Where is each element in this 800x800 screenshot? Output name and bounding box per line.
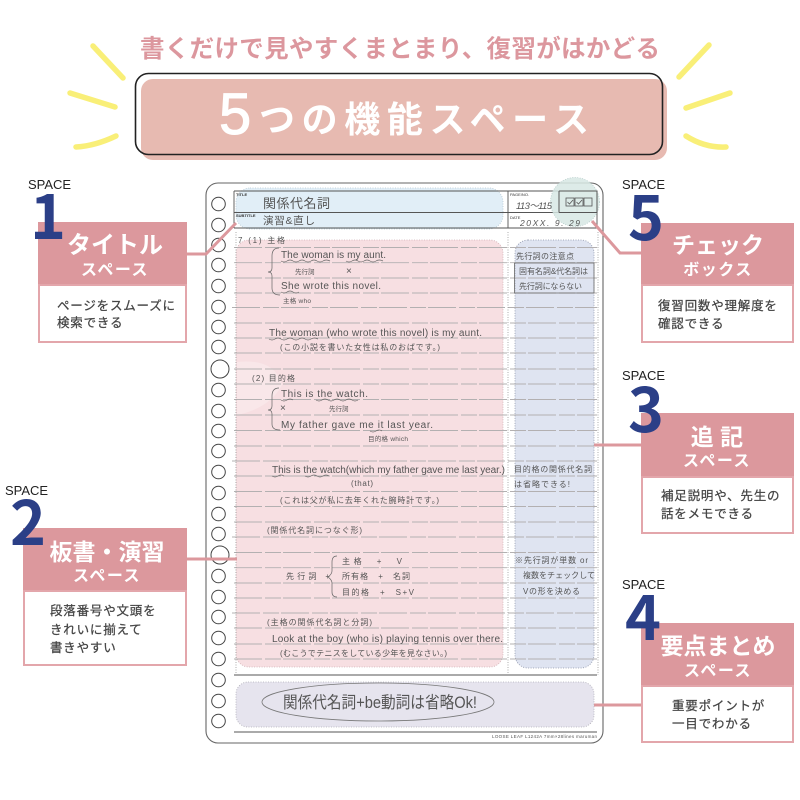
callout 5: check box space: 5 — [628, 169, 664, 258]
callout 5: check box space: ボックス — [683, 261, 753, 279]
callout 3: notes space: 追 記 — [691, 424, 743, 450]
title banner: つの機能スペース — [259, 99, 589, 140]
board handwriting: She wrote this novel. — [281, 281, 381, 292]
summary bubble — [262, 683, 494, 721]
connector: summary — [594, 704, 641, 706]
board handwriting: 目的格 which — [368, 434, 408, 443]
board handwriting: The woman (who wrote this novel) is my aunt. — [269, 328, 482, 339]
board handwriting: (主格の関係代名詞と分詞) — [267, 617, 372, 627]
board handwriting: My father gave me it last year. — [281, 420, 433, 431]
header labels and handwriting: PAGE/NO. — [510, 192, 529, 197]
space 1 highlight: title area — [236, 188, 503, 229]
callout 3: notes space: SPACE — [622, 368, 665, 383]
connector: board — [187, 558, 237, 560]
callout 1: title space: 検索できる — [57, 316, 123, 330]
board handwriting: 7 (1) 主格 — [238, 235, 285, 245]
callout 1: title space: 1 — [30, 168, 66, 257]
decorative sun rays left — [70, 46, 123, 147]
notes column handwriting: 先行詞の注意点 — [516, 251, 574, 261]
board handwriting: 主格 who — [283, 296, 311, 305]
board handwriting: (この小説を書いた女性は私のおばです。) — [280, 342, 440, 352]
callout 1: title space: スペース — [81, 262, 149, 279]
callout 1: title space: ページをスムーズに — [57, 298, 176, 313]
board handwriting: 目的格 + S+V — [342, 587, 415, 597]
callout 3: notes space — [622, 361, 794, 533]
callout 5: check box space: 確認できる — [658, 316, 724, 331]
footer brand: LOOSE LEAF L1242A 7mm×28lines maruman — [492, 734, 597, 739]
notes column handwriting: ※先行詞が単数 or — [515, 555, 588, 565]
notes column handwriting: 複数をチェックして — [523, 570, 595, 580]
board handwriting: This is the watch(which my father gave me last year.) — [272, 465, 505, 476]
board handwriting: (2) 目的格 — [252, 373, 295, 383]
callout 3: notes space: 話をメモできる — [661, 507, 754, 521]
notes column handwriting — [514, 251, 595, 596]
callout 5: check box space: 復習回数や理解度を — [658, 298, 778, 313]
header boxes — [234, 191, 597, 228]
callout 3: notes space: スペース — [683, 453, 751, 470]
callout 4: summary space: 要点まとめ — [660, 633, 776, 659]
callout 4: summary space — [622, 569, 794, 742]
board handwriting: Look at the boy (who is) playing tennis over there. — [272, 634, 503, 645]
space 4 highlight: summary area — [236, 682, 594, 727]
callout 1: title space: SPACE — [28, 177, 71, 192]
callout 2: board space: SPACE — [5, 483, 48, 498]
callout 2: board space: 板書・演習 — [50, 539, 164, 565]
board handwriting: (これは父が私に去年くれた腕時計です。) — [280, 495, 439, 505]
check box highlight circle — [550, 178, 600, 226]
notebook page — [206, 178, 603, 743]
board handwriting: 先行詞 — [295, 267, 315, 276]
header labels and handwriting: 演習&直し — [263, 214, 315, 227]
decorative sun rays right — [679, 45, 730, 147]
callout 5: check box space — [622, 169, 794, 342]
notes column handwriting: 目的格の関係代名詞 — [514, 464, 592, 474]
header labels and handwriting: TITLE — [236, 192, 247, 197]
callout 5: check box space: チェック — [672, 232, 764, 258]
callout 1: title space — [28, 168, 187, 342]
board handwriting: × — [346, 266, 352, 277]
connector: check box — [592, 221, 641, 253]
callout 2: board space: きれいに揃えて — [50, 622, 142, 637]
notes column handwriting: 先行詞にならない — [519, 281, 582, 291]
header labels and handwriting: DATE — [510, 215, 521, 220]
board handwriting: (むこうでテニスをしている少年を見なさい。) — [280, 648, 447, 658]
binder holes — [211, 197, 229, 728]
callout 2: board space: 段落番号や文頭を — [50, 603, 156, 618]
notes column handwriting: Vの形を決める — [523, 586, 580, 596]
callout 4: summary space: スペース — [684, 663, 752, 680]
connector: title — [187, 223, 236, 254]
summary bubble: 関係代名詞+be動詞は省略Ok! — [283, 693, 477, 712]
callout 5: check box space: SPACE — [622, 177, 665, 192]
callout 4: summary space: 一目でわかる — [672, 717, 752, 731]
callout 3: notes space: 補足説明や、先生の — [661, 488, 780, 503]
callout 2: board space — [5, 474, 187, 665]
board handwriting: 先行詞 — [329, 404, 349, 413]
heading: subtitle: 書くだけで見やすくまとまり、復習がはかどる — [140, 34, 660, 63]
board handwriting: × — [280, 403, 286, 414]
callout 2: board space: 書きやすい — [50, 641, 117, 655]
header labels and handwriting: 20XX. 9. 29 — [519, 218, 580, 228]
callout 2: board space: 2 — [10, 474, 46, 563]
space 2 highlight: board area — [236, 240, 503, 667]
board handwriting — [238, 235, 505, 658]
check boxes — [559, 191, 597, 212]
notes column handwriting: 固有名詞&代名詞は — [519, 266, 588, 276]
board handwriting: This is the watch. — [281, 389, 368, 400]
callout 4: summary space: 重要ポイントが — [672, 698, 765, 713]
callout 2: board space: スペース — [73, 568, 141, 585]
callout 3: notes space: 3 — [628, 361, 664, 450]
title banner — [136, 74, 667, 160]
callout 1: title space: タイトル — [67, 232, 163, 259]
header labels and handwriting: SUBTITLE — [236, 213, 256, 218]
title banner: 5 — [219, 82, 251, 147]
board handwriting: 主格 + V — [342, 556, 403, 566]
header labels and handwriting: 113～115 — [516, 201, 553, 212]
notes column handwriting: は省略できる! — [514, 479, 570, 489]
board handwriting: 先行詞 + — [286, 571, 330, 581]
header labels and handwriting: 関係代名詞 — [263, 196, 330, 211]
board handwriting: (関係代名詞につなぐ形) — [267, 525, 362, 535]
connector: notes — [594, 444, 641, 446]
space 3 highlight: notes column — [515, 240, 594, 668]
board handwriting: 所有格 + 名詞 — [342, 571, 410, 581]
callout 4: summary space: 4 — [625, 569, 661, 658]
board handwriting: The woman is my aunt. — [281, 250, 386, 261]
header labels and handwriting — [236, 192, 580, 228]
callout 4: summary space: SPACE — [622, 577, 665, 592]
board handwriting: (that) — [351, 479, 373, 488]
